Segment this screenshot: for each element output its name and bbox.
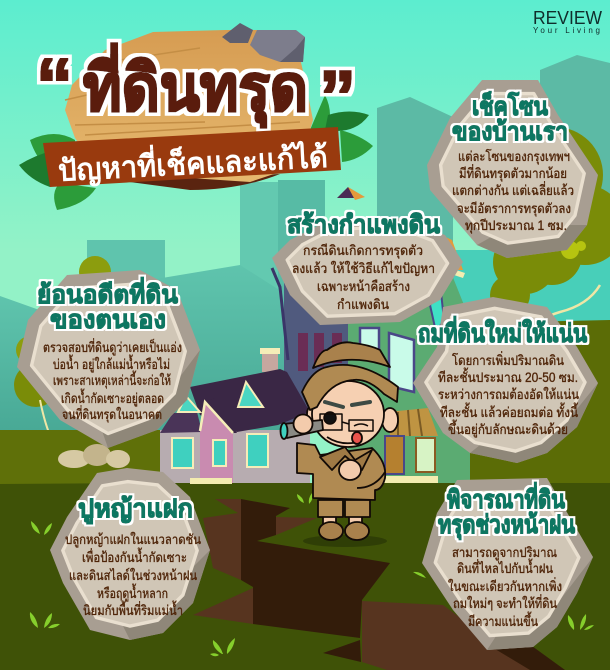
quote close: ” xyxy=(319,55,356,138)
body text: และดินสไลด์ในช่วงหน้าฝน xyxy=(69,567,197,583)
collar xyxy=(320,447,372,470)
face xyxy=(312,381,384,447)
ground crack xyxy=(193,499,565,670)
grass tufts xyxy=(30,493,594,656)
house xyxy=(160,348,310,484)
binoculars xyxy=(280,414,323,439)
body text: กรณีดินเกิดการทรุดตัว xyxy=(303,243,423,259)
body text: นิยมกับพื้นที่ริมแม่น้ำ xyxy=(83,600,183,618)
background sky xyxy=(0,0,610,500)
subtitle banner: ปัญหาที่เช็คและแก้ได้ xyxy=(57,135,329,189)
panel: land history xyxy=(17,270,200,448)
dormers xyxy=(238,382,263,407)
body text: เกิดน้ำกัดเซาะอยู่ตลอด xyxy=(61,388,164,407)
body text xyxy=(448,545,562,629)
body text: กำแพงดิน xyxy=(337,297,389,312)
character: old man with binoculars xyxy=(280,342,398,547)
body text xyxy=(43,338,182,423)
body text: ทุกปีประมาณ 1 ซม. xyxy=(465,218,567,234)
smile and tongue xyxy=(327,432,362,444)
body text: หรือฤดูน้ำหลาก xyxy=(97,583,168,602)
body text: ตรวจสอบที่ดินดูว่าเคยเป็นแอ่ง xyxy=(43,338,182,356)
panel: retaining wall xyxy=(272,211,463,325)
chimney xyxy=(260,348,280,372)
panel: check zone xyxy=(427,80,598,258)
body text: ในขณะเดียวกันหากเพิ่ง xyxy=(448,577,562,594)
windows xyxy=(172,438,193,468)
heading xyxy=(438,482,575,541)
quote open: “ xyxy=(36,43,73,126)
ears xyxy=(307,405,398,432)
panel: vetiver grass xyxy=(50,468,210,640)
heading: ย้อนอดีตที่ดิน xyxy=(37,277,178,309)
background city buildings xyxy=(0,55,610,440)
heading: ของตนเอง xyxy=(50,306,166,334)
shirt xyxy=(297,443,385,500)
body text xyxy=(292,243,435,312)
left trees xyxy=(14,256,111,440)
body text xyxy=(452,148,574,234)
main title: ที่ดินทรุด xyxy=(83,43,308,128)
glasses and eye xyxy=(320,412,373,431)
rocks on grass xyxy=(58,444,130,468)
body text: เพราะสาเหตุเหล่านี้จะก่อให้ xyxy=(53,370,171,389)
heading: ทรุดช่วงหน้าฝน xyxy=(438,511,575,541)
body text xyxy=(438,351,579,438)
body text: ทีละชั้นประมาณ 20-50 ซม. xyxy=(438,367,578,385)
title group xyxy=(19,23,373,210)
eyebrows xyxy=(325,402,370,407)
body text xyxy=(65,531,201,618)
body text: ระหว่างการถมต้องอัดให้แน่น xyxy=(438,386,579,402)
heading: สร้างกำแพงดิน xyxy=(287,211,440,239)
right arm cuff xyxy=(357,472,385,488)
building: purple tower xyxy=(272,268,350,423)
body text: จนที่ดินทรุดในอนาคต xyxy=(62,405,162,423)
body text: ดินที่ไหลไปกับน้ำฝน xyxy=(457,558,553,576)
body text: บ่อน้ำ อยู่ใกล้แม่น้ำหรือไม่ xyxy=(53,354,170,373)
body text: แต่ละโซนของกรุงเทพฯ xyxy=(458,148,570,165)
shadow under character xyxy=(303,535,387,547)
body text: เพื่อป้องกันน้ำกัดเซาะ xyxy=(82,547,187,565)
body text: โดยการเพิ่มปริมาณดิน xyxy=(452,351,564,368)
body text: ลงแล้ว ให้ใช้วิธีแก้ไขปัญหา xyxy=(292,260,435,276)
body text: จะมีอัตราการทรุดตัวลง xyxy=(457,201,571,217)
main roof xyxy=(190,369,310,432)
right tree foliage xyxy=(490,127,610,328)
heading: เช็คโซน xyxy=(472,91,548,121)
body text: ขึ้นอยู่กับลักษณะดินด้วย xyxy=(448,419,568,438)
building: green tower xyxy=(348,270,470,483)
body text: สามารถดูจากปริมาณ xyxy=(452,545,557,561)
panel: rainy season xyxy=(422,478,593,650)
stones on sign xyxy=(222,23,305,62)
body text: ปลูกหญ้าแฝกในแนวลาดชัน xyxy=(65,531,201,548)
heading: พิจารณาที่ดิน xyxy=(447,482,565,514)
left wing roof xyxy=(160,412,202,433)
wood sign xyxy=(65,30,313,190)
body text: ทีละชั้น แล้วค่อยถมต่อ ทั้งนี้ xyxy=(440,402,578,420)
heading xyxy=(452,91,568,146)
body text: เฉพาะหน้าคือสร้าง xyxy=(317,279,410,294)
fist xyxy=(339,460,361,480)
heading: ปูหญ้าแฝก xyxy=(78,495,193,525)
body text: มีที่ดินทรุดตัวมากน้อย xyxy=(459,164,567,182)
leaves xyxy=(19,95,373,210)
center gable xyxy=(200,402,233,483)
heading xyxy=(37,277,178,334)
heading: ของบ้านเรา xyxy=(452,118,568,146)
body text: มีความแน่นขึ้น xyxy=(468,611,538,629)
body text: แตกต่างกัน แต่เฉลี่ยแล้ว xyxy=(452,181,574,198)
legs and shoes xyxy=(318,500,370,540)
body text: ถมใหม่ๆ จะทำให้ที่ดิน xyxy=(453,594,557,611)
logo: Your Living xyxy=(533,26,602,35)
logo: REVIEW xyxy=(533,8,602,28)
panel: compact fill xyxy=(413,297,598,463)
ground xyxy=(0,320,610,670)
building: orange roof top xyxy=(337,187,465,278)
hat xyxy=(302,342,398,410)
